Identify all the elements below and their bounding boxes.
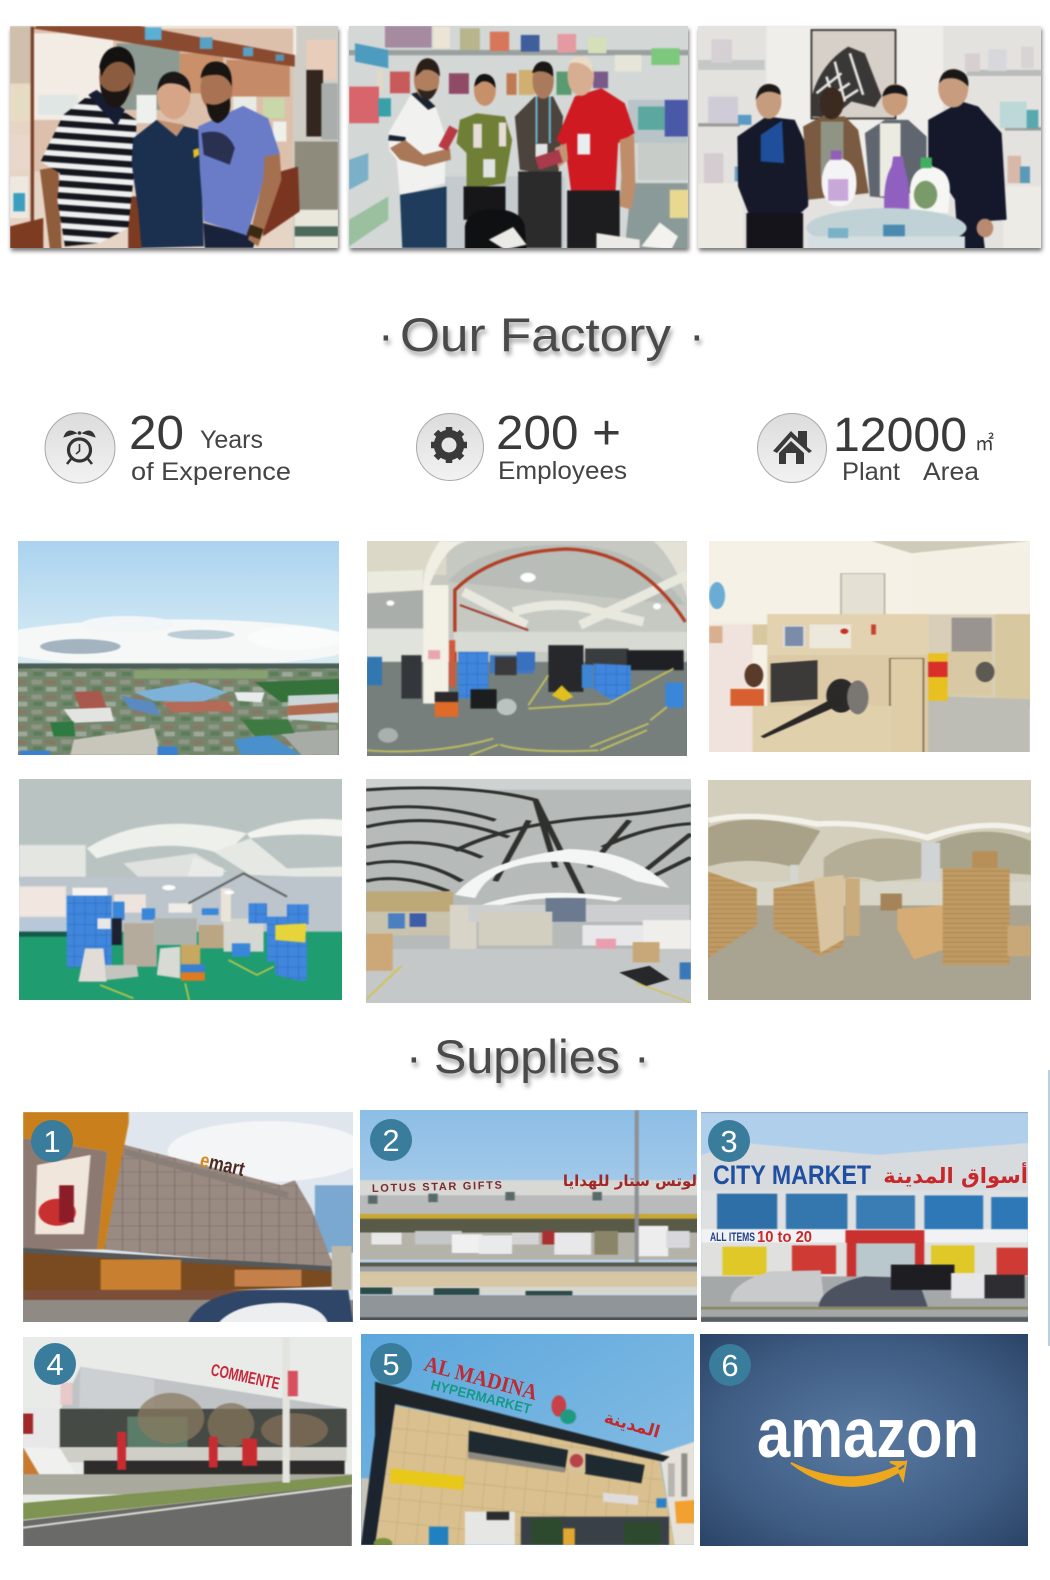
sign: AL MADINA: AL MADINA <box>422 1351 540 1405</box>
store photo 1: emart <box>20 1111 368 1324</box>
photo: aerial view of factory area <box>18 541 339 755</box>
title: Our Factory: · <box>689 308 705 361</box>
label: Area: Area <box>923 458 979 486</box>
icon: alarm clock <box>45 413 115 483</box>
sign: all items price: ALL ITEMS <box>710 1230 755 1244</box>
photo: green floor workshop <box>19 779 342 1000</box>
logo text: amazon: amazon <box>757 1394 979 1472</box>
store photo 5: Al Madina Hypermarket <box>355 1330 698 1550</box>
photo: four men with detergent bottles under a zebra picture <box>695 20 1045 253</box>
title: Supplies: Supplies <box>434 1030 620 1083</box>
store photo 4: Continente <box>20 1335 355 1549</box>
number badge 5 <box>370 1343 412 1385</box>
stat: 200+ employees <box>416 407 627 485</box>
number badge 3 <box>708 1120 750 1162</box>
store photo 6: Amazon <box>700 1334 1028 1546</box>
stat: 20 years of experience <box>45 407 291 486</box>
sign: Arabic name: المدينة <box>602 1408 662 1443</box>
title: Our Factory: Our Factory <box>400 308 672 361</box>
logo smile arrow <box>791 1462 906 1486</box>
unit: square metres: ㎡ <box>975 431 994 455</box>
number badge 3: 3 <box>720 1124 738 1159</box>
photo: factory floor with crates <box>367 541 687 756</box>
sign: City Market: CITY MARKET <box>713 1160 871 1190</box>
photo: three men in a shop <box>0 20 353 253</box>
number badge 1: 1 <box>43 1124 61 1159</box>
number badge 2: 2 <box>382 1123 400 1158</box>
sign: Continente: COMMENTE <box>209 1360 282 1393</box>
title: Our Factory: · <box>378 308 394 361</box>
sign: Lotus Star Gifts: LOTUS STAR GIFTS <box>372 1180 502 1195</box>
photo: warehouse with cartons <box>708 780 1031 1000</box>
number badge 6 <box>709 1344 751 1386</box>
title: Supplies: · <box>634 1030 650 1083</box>
text: 20 Years: 20 <box>129 407 184 460</box>
number badge 2 <box>370 1119 412 1161</box>
number badge 4 <box>34 1343 76 1385</box>
label: Years: Years <box>200 426 263 454</box>
number badge 6: 6 <box>721 1348 739 1383</box>
number badge 5: 5 <box>382 1347 400 1382</box>
number badge 4: 4 <box>46 1347 64 1382</box>
icon: house <box>758 414 826 482</box>
sign: HYPERMARKET: HYPERMARKET <box>429 1376 533 1417</box>
sign: emart: emart <box>198 1149 247 1181</box>
photo: packing machine with worker <box>709 541 1030 752</box>
number badge 1 <box>31 1120 73 1162</box>
decorative edge sliver <box>1048 1070 1050 1346</box>
label: Plant: Plant <box>842 458 900 486</box>
store photo 2: Lotus Star Gifts <box>355 1107 703 1324</box>
store photo 3: City Market <box>697 1110 1031 1326</box>
icon: gear <box>416 414 484 480</box>
photo: metal roof production hall <box>366 779 691 1003</box>
text: 12000: 12000 <box>833 409 967 462</box>
title: Supplies: · <box>406 1030 422 1083</box>
sign: Arabic shop name: أسواق المدينة <box>883 1161 1028 1188</box>
photo: four men at a trade fair booth <box>345 20 691 253</box>
text: 200 +: 200 + <box>496 407 621 460</box>
label: Employees: Employees <box>498 457 627 485</box>
label: of Experence: of Experence <box>131 458 291 486</box>
sign: price 10 to 20: 10 to 20 <box>757 1229 812 1246</box>
sign: Arabic shop name: لوتس ستار للهدايا <box>563 1172 697 1190</box>
stat: 12000 square metre plant area <box>758 409 994 486</box>
